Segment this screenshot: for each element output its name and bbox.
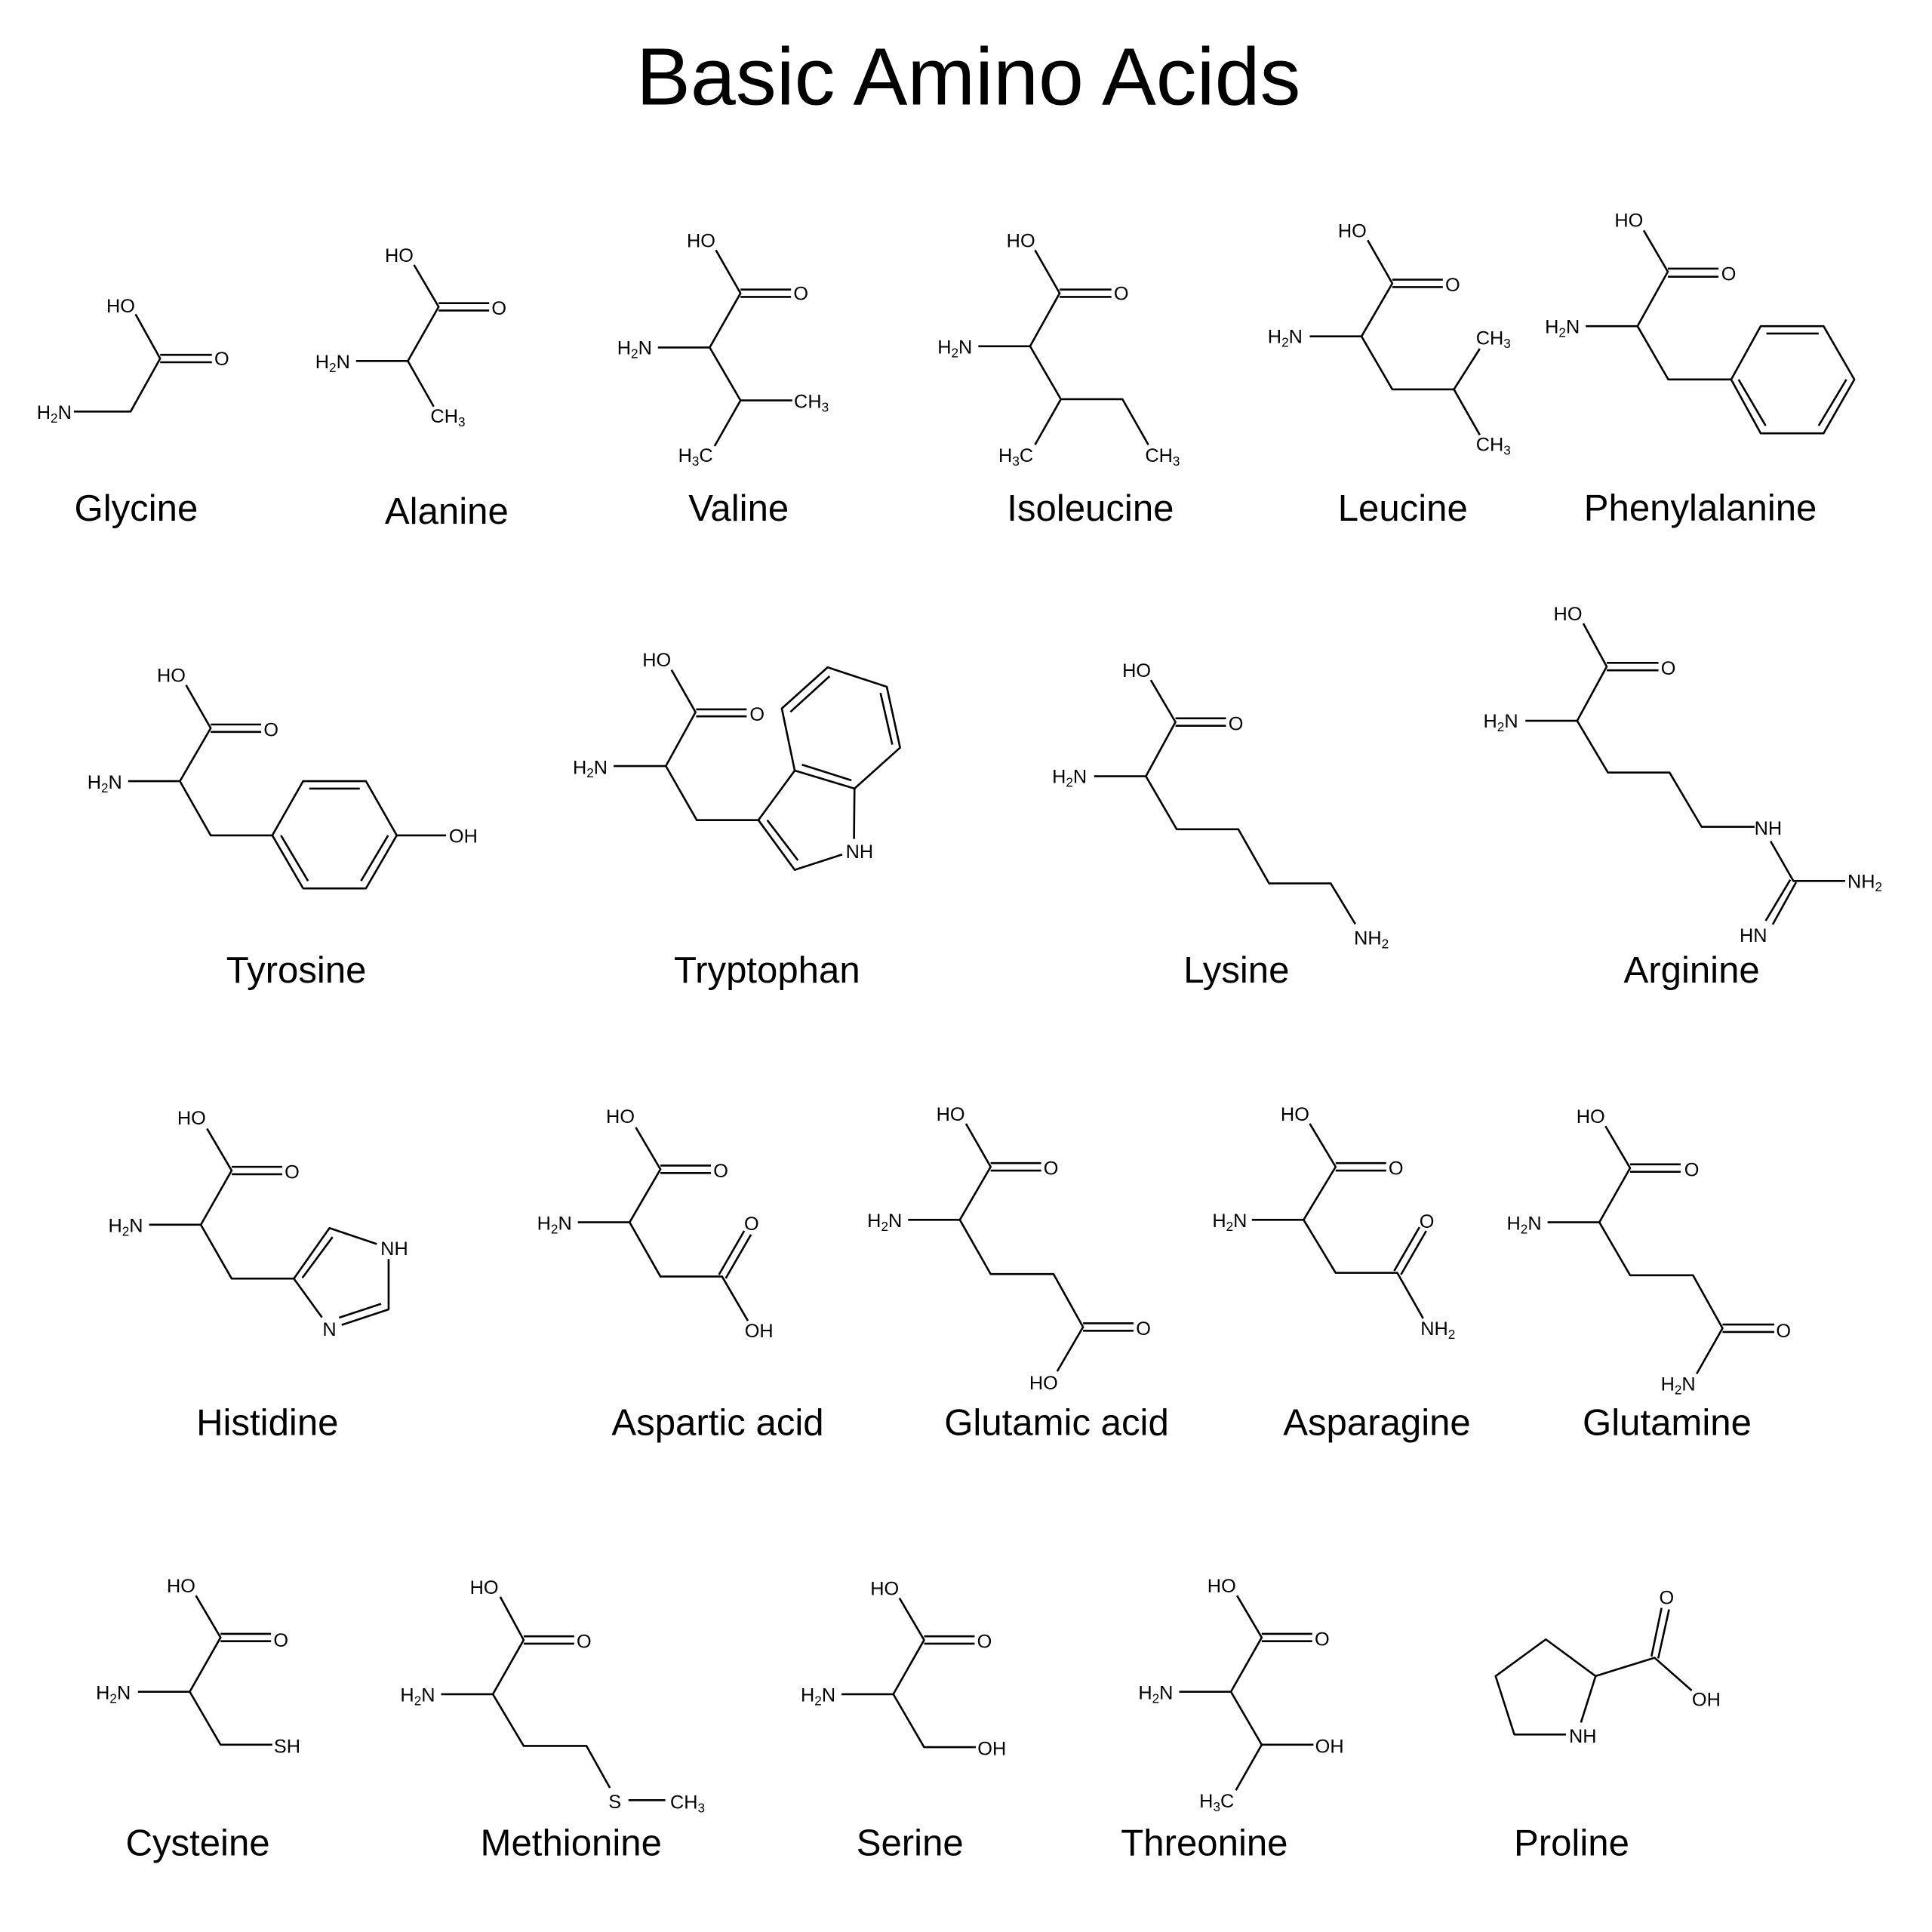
bonds [614, 670, 758, 820]
molecule: asparagine [1212, 1104, 1471, 1444]
atom labels: O [285, 1162, 300, 1183]
atom labels: H [315, 352, 329, 373]
imidazole ring [294, 1228, 389, 1325]
atom labels: HO [470, 1577, 499, 1598]
atom labels: N [888, 1211, 902, 1232]
atom labels: H [400, 1685, 414, 1706]
atom labels [1484, 604, 1882, 946]
atom labels: C [1020, 445, 1033, 466]
name: Alanine [385, 491, 509, 532]
atom labels: O [1776, 1321, 1791, 1342]
atom labels: S [608, 1792, 621, 1813]
bonds [1586, 230, 1731, 380]
atom labels: HO [157, 666, 186, 687]
atom labels: SH [274, 1736, 300, 1757]
atom labels: HO [1122, 660, 1151, 681]
atom labels: O [749, 704, 764, 725]
molecule: glycine [37, 296, 229, 529]
atom labels: HO [1007, 230, 1035, 251]
atom labels: H [1199, 1791, 1213, 1812]
name: Glutamic acid [944, 1403, 1169, 1444]
name: Serine [857, 1823, 964, 1863]
atom labels: O [1044, 1158, 1058, 1180]
name: Lysine [1183, 950, 1289, 991]
atom labels [1212, 1104, 1455, 1342]
bonds [1496, 1608, 1692, 1734]
atom labels [1268, 220, 1511, 457]
atom labels: 2 [109, 1690, 117, 1706]
atom labels: HO [167, 1576, 195, 1597]
atom labels [37, 296, 229, 426]
atom labels [1138, 1576, 1344, 1814]
atom labels: CH [1476, 435, 1503, 456]
atom labels: 2 [101, 780, 109, 795]
atom labels: C [1220, 1791, 1234, 1812]
atom labels: N [822, 1685, 835, 1706]
bonds [908, 1124, 1134, 1371]
atom labels: N [58, 402, 72, 423]
molecule: lysine [1052, 660, 1389, 991]
atom labels: N [1073, 767, 1087, 788]
atom labels [573, 650, 873, 863]
bonds [441, 1597, 666, 1800]
atom labels: CH [1476, 328, 1503, 349]
atom labels [1052, 660, 1389, 951]
atom labels [96, 1576, 300, 1757]
name: Glycine [75, 488, 198, 529]
atom labels: H [937, 337, 952, 358]
name: Proline [1514, 1823, 1629, 1863]
atom labels: HO [1281, 1104, 1309, 1125]
atom labels: 2 [1875, 879, 1882, 894]
atom labels: O [1661, 658, 1675, 679]
name: Tyrosine [226, 950, 366, 991]
molecule: alanine [315, 245, 509, 532]
atom labels: 3 [1012, 454, 1020, 469]
atom labels: OH [1315, 1736, 1344, 1757]
atom labels: HO [1208, 1576, 1236, 1597]
molecule: aspartic acid [537, 1106, 824, 1444]
bonds [138, 1595, 272, 1745]
atom labels: 2 [1521, 1221, 1527, 1236]
atom labels: 3 [1173, 454, 1180, 469]
bonds [74, 314, 212, 411]
atom labels: HO [1614, 210, 1643, 231]
atom labels: H [678, 445, 692, 466]
atom labels: O [273, 1630, 288, 1651]
atom labels: N [322, 1319, 337, 1340]
molecule: glutamic acid [867, 1104, 1169, 1444]
atom labels: HO [937, 1104, 965, 1125]
name: Aspartic acid [611, 1403, 824, 1444]
bonds [658, 250, 792, 446]
atom labels: H [1268, 327, 1281, 348]
bonds [841, 1598, 976, 1747]
atom labels: CH [1145, 445, 1173, 466]
name: Cysteine [125, 1823, 270, 1863]
atom labels: HO [1577, 1106, 1605, 1128]
atom labels: O [744, 1214, 759, 1235]
atom labels: H [88, 772, 101, 793]
bonds [356, 265, 489, 407]
atom labels: O [793, 284, 808, 305]
atom labels [88, 666, 478, 848]
atom labels: O [1229, 713, 1243, 734]
atom labels: NH [1569, 1726, 1597, 1747]
atom labels: 3 [822, 399, 829, 414]
atom labels: HO [1554, 604, 1583, 625]
atom labels [1569, 1588, 1721, 1747]
atom labels: H [573, 757, 586, 778]
atom labels: OH [1692, 1689, 1721, 1710]
atom labels [1507, 1106, 1791, 1397]
atom labels: N [117, 1682, 131, 1703]
atom labels: NH [1755, 818, 1782, 839]
benzene ring [1731, 326, 1854, 433]
atom labels: N [1289, 327, 1303, 348]
atom labels [867, 1104, 1151, 1394]
name: Leucine [1338, 488, 1468, 529]
atom labels: O [263, 720, 278, 741]
atom labels [801, 1578, 1006, 1760]
atom labels [537, 1106, 774, 1342]
atom labels: CH [794, 391, 822, 412]
atom labels: 2 [1226, 1219, 1233, 1234]
atom labels: NH [846, 841, 873, 863]
atom labels: 2 [586, 765, 594, 780]
atom labels: H [998, 445, 1012, 466]
name: Threonine [1121, 1823, 1288, 1863]
atom labels: O [1136, 1318, 1151, 1340]
molecule: tyrosine [88, 666, 478, 991]
atom labels: N [1681, 1374, 1696, 1395]
atom labels [1545, 210, 1736, 340]
indole ring [758, 667, 900, 870]
atom labels: 2 [329, 360, 337, 375]
atom labels: H [537, 1213, 551, 1234]
atom labels: HO [1029, 1373, 1058, 1394]
bonds [578, 1128, 751, 1321]
molecule: threonine [1121, 1576, 1344, 1863]
atom labels: N [1504, 711, 1518, 732]
atom labels: N [337, 352, 350, 373]
atom labels: N [1527, 1213, 1542, 1234]
bonds [1094, 680, 1355, 924]
atom labels: H [108, 1216, 122, 1237]
atom labels: H [867, 1211, 881, 1232]
atom labels: N [129, 1216, 143, 1237]
name: Valine [688, 488, 789, 529]
atom labels: HO [177, 1108, 206, 1129]
atom labels: 2 [631, 346, 638, 361]
atom labels: O [1389, 1158, 1404, 1180]
name: Phenylalanine [1584, 488, 1817, 529]
atom labels: N [594, 757, 608, 778]
atom labels [400, 1577, 705, 1816]
bonds [128, 685, 446, 835]
atom labels: 2 [122, 1224, 129, 1239]
molecule: methionine [400, 1577, 705, 1863]
atom labels: 2 [1497, 719, 1504, 734]
atom labels: O [1659, 1588, 1674, 1609]
atom labels: 2 [1675, 1382, 1681, 1397]
molecule: valine [617, 230, 829, 529]
atom labels: H [1484, 711, 1497, 732]
benzene ring [272, 781, 397, 888]
molecule: leucine [1268, 220, 1511, 529]
name: Tryptophan [674, 950, 860, 991]
atom labels: 3 [692, 454, 699, 469]
atom labels: H [617, 337, 631, 358]
bonds [1548, 1126, 1774, 1374]
atom labels [108, 1108, 408, 1340]
atom labels [315, 245, 506, 429]
atom labels: H [37, 402, 51, 423]
molecule: serine [801, 1578, 1006, 1863]
atom labels: N [1566, 317, 1580, 338]
atom labels: HO [385, 245, 414, 266]
atom labels: 2 [814, 1694, 822, 1709]
atom labels [937, 230, 1180, 469]
atom labels: N [558, 1213, 572, 1234]
atom labels: H [96, 1682, 109, 1703]
name: Histidine [196, 1403, 338, 1444]
atom labels: NH [1354, 928, 1382, 949]
atom labels: O [1315, 1629, 1330, 1650]
molecule: cysteine [96, 1576, 300, 1863]
name: Glutamine [1583, 1403, 1752, 1444]
atom labels: 3 [698, 1801, 705, 1816]
atom labels: H [1507, 1213, 1521, 1234]
molecule: proline [1496, 1588, 1721, 1863]
name: Isoleucine [1007, 488, 1174, 529]
atom labels: 3 [1213, 1799, 1220, 1814]
atom labels: OH [449, 826, 478, 848]
atom labels: HO [870, 1578, 899, 1599]
atom labels: O [1114, 284, 1129, 305]
atom labels: 2 [1382, 936, 1389, 951]
atom labels: HO [1338, 220, 1367, 242]
atom labels: O [214, 349, 229, 370]
molecule: glutamine [1507, 1106, 1791, 1444]
bonds [1179, 1595, 1313, 1790]
atom labels: 3 [1503, 336, 1511, 351]
atom labels: O [1420, 1211, 1434, 1232]
atom labels: HO [642, 650, 671, 671]
atom labels: 2 [1066, 774, 1073, 789]
atom labels: H [1545, 317, 1558, 338]
atom labels: H [801, 1685, 814, 1706]
atom labels: O [1684, 1159, 1699, 1180]
molecule: tryptophan [573, 650, 900, 991]
name: Methionine [481, 1823, 662, 1863]
atom labels: 3 [1503, 442, 1511, 457]
molecule: histidine [108, 1108, 408, 1444]
atom labels: CH [670, 1792, 698, 1814]
atom labels: 2 [551, 1221, 558, 1236]
atom labels: 3 [458, 414, 466, 429]
atom labels [617, 230, 829, 469]
name: Asparagine [1283, 1403, 1471, 1444]
atom labels: O [713, 1161, 728, 1182]
bonds [1310, 240, 1480, 435]
atom labels: 2 [1281, 335, 1289, 350]
atom labels: NH [1847, 871, 1875, 892]
atom labels: O [1445, 275, 1460, 296]
atom labels: H [1138, 1682, 1152, 1703]
atom labels: N [109, 772, 122, 793]
atom labels: HO [687, 230, 715, 251]
atom labels: 2 [1448, 1327, 1455, 1342]
bonds [1252, 1124, 1426, 1318]
title: Basic Amino Acids [636, 30, 1300, 122]
molecule: isoleucine [937, 230, 1180, 529]
atom labels: 2 [414, 1694, 421, 1709]
bonds [149, 1129, 294, 1278]
bonds [978, 250, 1149, 445]
atom labels: H [1212, 1211, 1226, 1232]
atom labels: 2 [952, 345, 958, 360]
atom labels: N [1233, 1211, 1247, 1232]
atom labels: O [491, 298, 506, 319]
atom labels: O [577, 1632, 592, 1653]
atom labels: C [699, 445, 713, 466]
atom labels: H [1052, 767, 1066, 788]
name: Arginine [1624, 950, 1760, 991]
atom labels: OH [745, 1321, 774, 1342]
atom labels: O [1721, 263, 1736, 285]
atom labels: NH [380, 1238, 408, 1260]
atom labels: N [421, 1685, 435, 1706]
atom labels: CH [430, 406, 458, 427]
atom labels: N [958, 337, 972, 358]
atom labels: O [977, 1632, 992, 1653]
molecule: phenylalanine [1545, 210, 1854, 529]
atom labels: N [1159, 1682, 1173, 1703]
atom labels: HO [606, 1106, 635, 1128]
atom labels: HO [106, 296, 135, 317]
atom labels: 2 [51, 411, 58, 426]
molecule: arginine [1484, 604, 1882, 991]
atom labels: 2 [1558, 325, 1566, 340]
atom labels: OH [977, 1739, 1006, 1760]
atom labels: H [1661, 1374, 1675, 1395]
bonds [1525, 623, 1845, 924]
atom labels: NH [1420, 1318, 1448, 1340]
atom labels: N [638, 337, 652, 358]
atom labels: 2 [881, 1219, 888, 1234]
atom labels: HN [1740, 925, 1767, 946]
atom labels: 2 [1152, 1690, 1159, 1706]
